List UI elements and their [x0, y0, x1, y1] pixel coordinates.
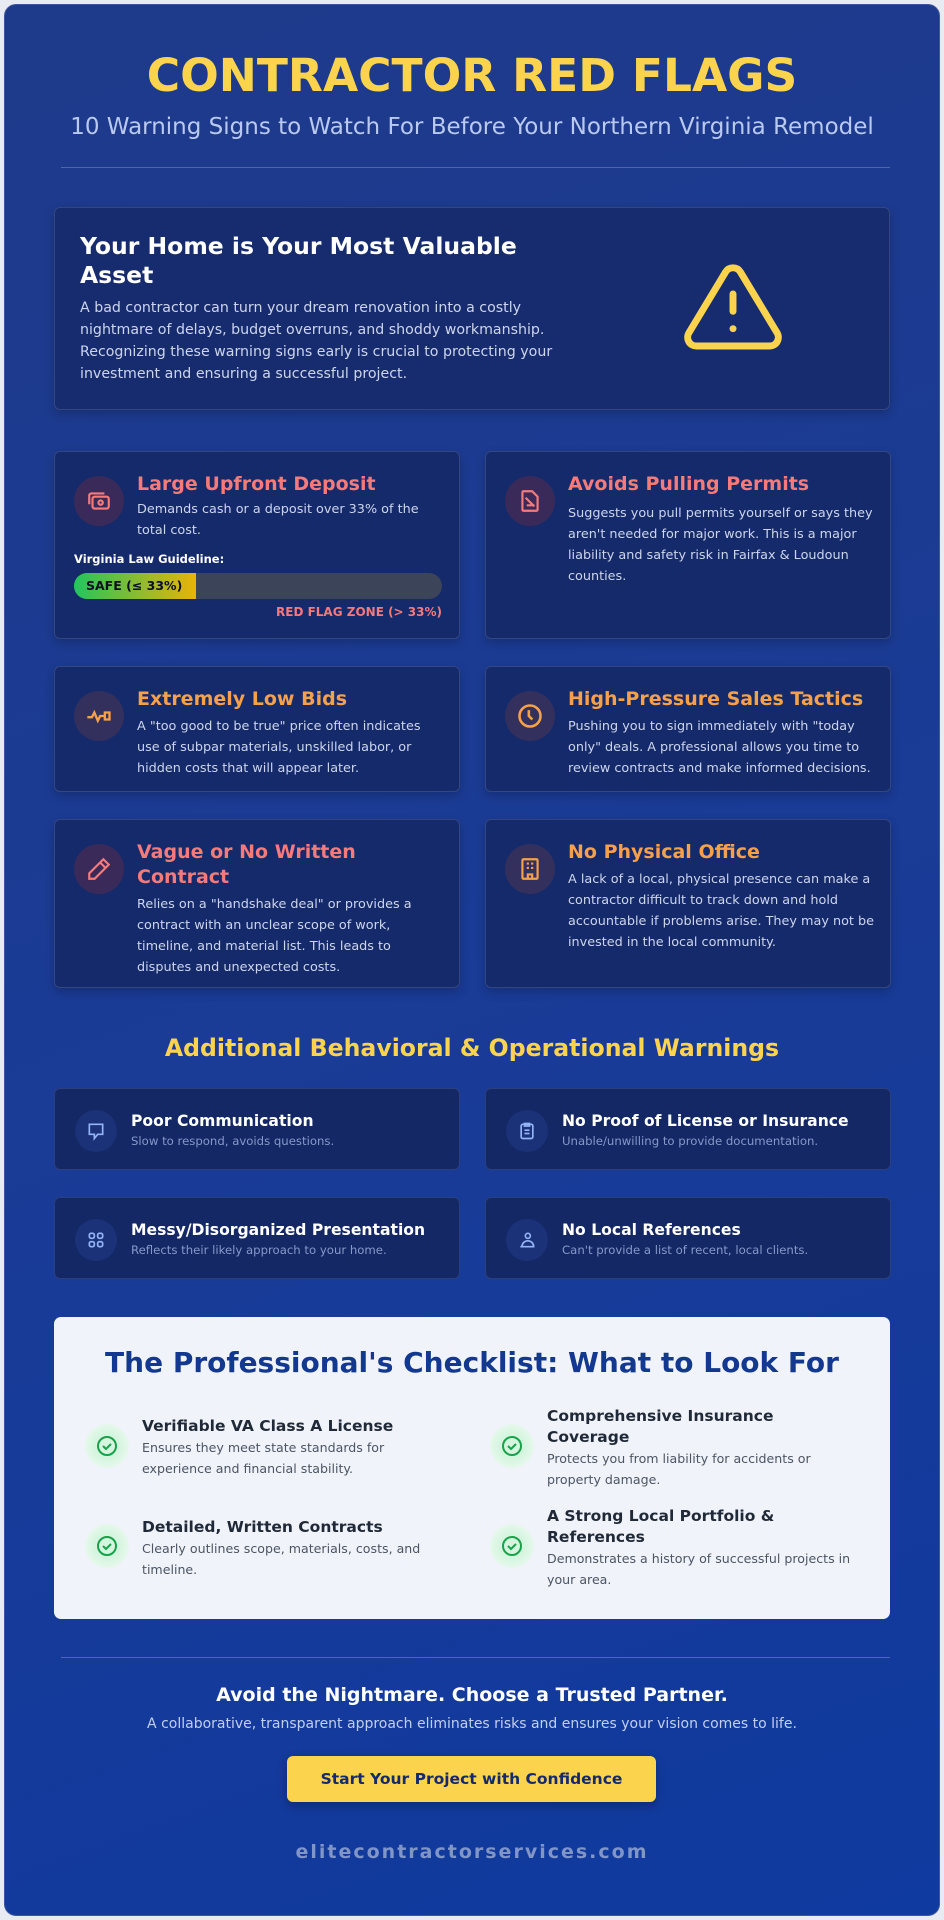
- button: [287, 1756, 656, 1802]
- card: high pressure: [485, 666, 891, 792]
- card: vague contract: Relies on a "handshake deal" or provides a contract with an unclear scope of work, timeline, and material list. This leads to disputes and unexpected costs.: [137, 897, 412, 975]
- closing heading: Avoid the Nightmare. Choose a Trusted Partner.: [216, 1684, 728, 1706]
- card: low bids: A "too good to be true" price often indicates use of subpar materials, unskilled labor, or hidden costs that will appear later.: [137, 719, 420, 776]
- panel: checklist: [54, 1317, 890, 1619]
- card: no office: No Physical Office: [568, 841, 760, 863]
- small card: references: No Local References: [562, 1221, 741, 1239]
- item: license: Ensures they meet state standards for experience and financial stability.: [142, 1440, 384, 1476]
- icon: check 3: [85, 1524, 129, 1568]
- card: avoids permits: Avoids Pulling Permits: [568, 473, 809, 495]
- icon: check 4: [490, 1524, 534, 1568]
- panel: intro: [54, 207, 890, 410]
- bar chart: deposit guideline: [74, 552, 442, 619]
- icon: chat: [75, 1110, 117, 1152]
- card: large upfront deposit: Demands cash or a deposit over 33% of the total cost.: [137, 502, 419, 538]
- closing text: A collaborative, transparent approach eliminates risks and ensures your vision comes to life.: [147, 1716, 797, 1732]
- small card: poor communication: Poor Communication: [131, 1112, 314, 1130]
- card: avoids permits: [485, 451, 891, 639]
- icon: money: [74, 476, 124, 526]
- button: Start Your Project with Confidence: [321, 1770, 622, 1788]
- card: large upfront deposit: Large Upfront Deposit: [137, 473, 376, 495]
- item: insurance: Comprehensive Insurance Coverage: [547, 1407, 773, 1446]
- card: large upfront deposit: [54, 451, 460, 639]
- small card: poor communication: [54, 1088, 460, 1170]
- card: low bids: Extremely Low Bids: [137, 688, 347, 710]
- small card: references: Can't provide a list of recent, local clients.: [562, 1243, 808, 1257]
- icon: trend: [74, 691, 124, 741]
- bar chart: deposit guideline: SAFE (≤ 33%): [86, 578, 182, 593]
- bar chart: deposit guideline: Virginia Law Guideline:: [74, 552, 224, 566]
- item: contracts: Clearly outlines scope, materials, costs, and timeline.: [142, 1541, 420, 1577]
- icon: check 1: [85, 1424, 129, 1468]
- icon: pen: [74, 844, 124, 894]
- icon: grid: [75, 1219, 117, 1261]
- intro heading: Your Home is Your Most Valuable Asset: [80, 232, 517, 289]
- subtitle: 10 Warning Signs to Watch For Before Your Northern Virginia Remodel: [70, 114, 874, 140]
- small card: messy: [54, 1197, 460, 1279]
- item: portfolio: [547, 1507, 850, 1587]
- item: insurance: Protects you from liability for accidents or property damage.: [547, 1451, 811, 1487]
- icon: warning: [684, 264, 782, 350]
- card: no office: [485, 819, 891, 988]
- small card: messy: Reflects their likely approach to your home.: [131, 1243, 387, 1257]
- card: no office: A lack of a local, physical presence can make a contractor difficult to track down and hold accountable if problems arise. They may not be invested in the local community.: [568, 872, 874, 950]
- card: vague contract: [54, 819, 460, 988]
- small card: license: No Proof of License or Insurance: [562, 1112, 849, 1130]
- footer url: elitecontractorservices.com: [295, 1841, 649, 1863]
- item: portfolio: Demonstrates a history of successful projects in your area.: [547, 1551, 850, 1587]
- card: low bids: [54, 666, 460, 792]
- small card: references: [485, 1197, 891, 1279]
- checklist title: The Professional's Checklist: What to Look For: [105, 1346, 839, 1379]
- icon: clock: [505, 691, 555, 741]
- card: high pressure: Pushing you to sign immediately with "today only" deals. A professional allows you time to review contracts and make informed decisions.: [568, 719, 871, 776]
- icon: building: [505, 844, 555, 894]
- icon: document: [505, 476, 555, 526]
- small card: poor communication: Slow to respond, avoids questions.: [131, 1134, 334, 1148]
- card: high pressure: High-Pressure Sales Tactics: [568, 688, 863, 710]
- item: portfolio: A Strong Local Portfolio & References: [547, 1507, 774, 1546]
- intro text: A bad contractor can turn your dream renovation into a costly nightmare of delays, budget overruns, and shoddy workmanship. Recognizing these warning signs early is crucial to protecting your investment and ensuring a successful project.: [80, 300, 552, 382]
- item: contracts: [142, 1518, 420, 1577]
- icon: check 2: [490, 1424, 534, 1468]
- icon: person: [506, 1219, 548, 1261]
- small card: license: [485, 1088, 891, 1170]
- item: insurance: [547, 1407, 811, 1487]
- item: license: Verifiable VA Class A License: [142, 1417, 393, 1435]
- item: license: [142, 1417, 393, 1476]
- title: CONTRACTOR RED FLAGS: [147, 49, 797, 102]
- card: vague contract: Vague or No Written Contract: [137, 841, 356, 888]
- icon: clipboard: [506, 1110, 548, 1152]
- small card: license: Unable/unwilling to provide documentation.: [562, 1134, 818, 1148]
- card: avoids permits: Suggests you pull permits yourself or says they aren't needed for major work. This is a major liability and safety risk in Fairfax & Loudoun counties.: [568, 506, 873, 584]
- small card: messy: Messy/Disorganized Presentation: [131, 1221, 425, 1239]
- item: contracts: Detailed, Written Contracts: [142, 1518, 383, 1536]
- section heading: Additional Behavioral & Operational Warnings: [165, 1034, 779, 1062]
- bar chart: deposit guideline: RED FLAG ZONE (> 33%): [276, 605, 442, 619]
